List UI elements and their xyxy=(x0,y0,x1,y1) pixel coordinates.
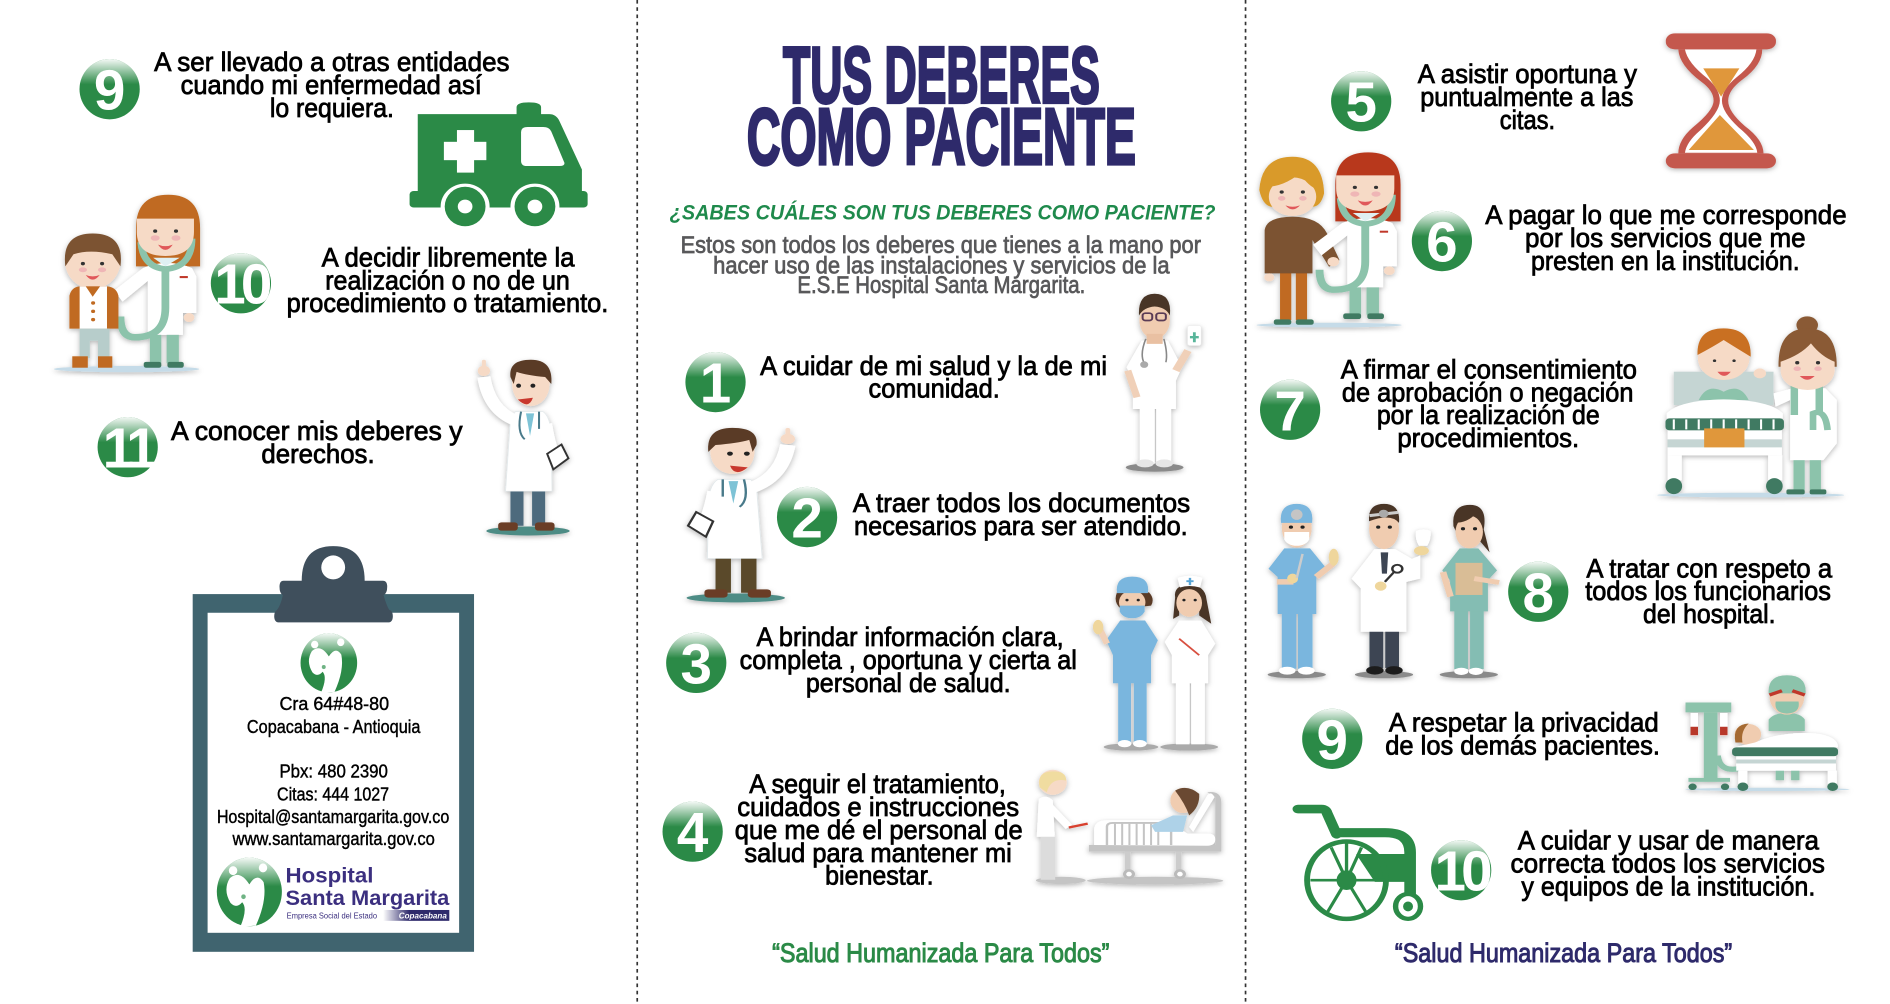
text: duty 9 right: A respetar la privacidad xyxy=(1389,708,1659,738)
badge 6: 6 xyxy=(1426,212,1458,275)
logo: Hospital Santa Margarita xyxy=(217,858,450,927)
text: duty 2 xyxy=(853,488,1190,541)
badge 8 xyxy=(1508,562,1568,625)
text: duty 5: puntualmente a las xyxy=(1420,82,1633,112)
text: duty 10 right: A cuidar y usar de manera xyxy=(1518,826,1819,856)
text: duty 7: de aprobación o negación xyxy=(1342,377,1633,407)
text: duty 8: A tratar con respeto a xyxy=(1586,553,1832,583)
illustration: woman with doctor xyxy=(1256,152,1402,327)
text: duty 7 xyxy=(1341,354,1637,453)
contact text xyxy=(217,693,449,849)
text: duty 11: derechos. xyxy=(261,439,375,469)
badge 9 xyxy=(1302,709,1362,772)
slogan navy: “Salud Humanizada Para Todos” xyxy=(1395,938,1732,968)
clipboard board xyxy=(193,546,474,952)
title: TUS DEBERES xyxy=(783,30,1100,119)
text: duty 3: personal de salud. xyxy=(806,668,1011,698)
intro paragraph xyxy=(681,232,1201,299)
text: duty 8: todos los funcionarios xyxy=(1585,576,1831,606)
contact text: Cra 64#48-80 xyxy=(279,693,389,714)
badge 3 xyxy=(666,633,726,696)
text: duty 4: cuidados e instrucciones xyxy=(737,792,1019,822)
text: duty 9 right: de los demás pacientes. xyxy=(1385,730,1660,761)
text: duty 4: salud para mantener mi xyxy=(744,838,1012,868)
text: duty 8 xyxy=(1585,553,1832,629)
badge 2 xyxy=(777,487,837,551)
panel: center column xyxy=(663,30,1223,968)
intro paragraph: E.S.E Hospital Santa Margarita. xyxy=(797,272,1085,299)
badge 4 xyxy=(663,802,723,865)
slogan green: “Salud Humanizada Para Todos” xyxy=(772,938,1109,968)
title: COMO PACIENTE xyxy=(747,92,1136,181)
logo: Hospital Santa Margarita: Santa Margarita xyxy=(285,885,450,910)
contact text: Citas: 444 1027 xyxy=(277,783,389,804)
illustration: child with doctor xyxy=(54,195,200,372)
text: duty 8: del hospital. xyxy=(1643,599,1776,629)
badge 9: 9 xyxy=(94,60,125,123)
text: duty 6: por los servicios que me xyxy=(1525,223,1806,253)
text: duty 6 xyxy=(1485,200,1847,276)
text: duty 7: por la realización de xyxy=(1377,400,1600,430)
subtitle question: ¿SABES CUÁLES SON TUS DEBERES COMO PACIENTE? xyxy=(670,201,1216,224)
text: duty 10 xyxy=(287,242,608,318)
panel: right column xyxy=(1256,33,1850,968)
text: duty 10 right: y equipos de la institución. xyxy=(1521,872,1815,902)
text: duty 1: A cuidar de mi salud y la de mi xyxy=(760,351,1107,381)
badge 6 xyxy=(1412,211,1472,275)
illustration: patient in bed with doctor xyxy=(1657,316,1844,497)
contact text: Copacabana - Antioquia xyxy=(247,716,421,737)
text: duty 2: A traer todos los documentos xyxy=(853,488,1190,518)
badge 3: 3 xyxy=(681,633,712,696)
text: duty 11: A conocer mis deberes y xyxy=(171,416,463,446)
text: duty 9 right xyxy=(1385,708,1660,761)
contact text: www.santamargarita.gov.co xyxy=(232,828,435,849)
text: duty 1 xyxy=(760,351,1107,404)
badge 1: 1 xyxy=(700,353,731,416)
icon: hourglass xyxy=(1666,33,1776,168)
intro paragraph: hacer uso de las instalaciones y servicios de la xyxy=(713,253,1170,280)
badge 7: 7 xyxy=(1274,380,1306,443)
badge 7 xyxy=(1260,380,1320,443)
text: duty 5: citas. xyxy=(1500,105,1555,135)
text: duty 10 right xyxy=(1511,826,1825,902)
text: duty 5: A asistir oportuna y xyxy=(1418,59,1638,89)
logo: Hospital Santa Margarita: Empresa Social del Estado xyxy=(287,910,377,920)
illustration: two nurses xyxy=(1093,576,1218,751)
text: duty 1: comunidad. xyxy=(869,374,1000,404)
text: duty 2: necesarios para ser atendido. xyxy=(854,511,1188,541)
badge 8: 8 xyxy=(1523,562,1554,625)
badge 5: 5 xyxy=(1345,72,1377,135)
text: duty 10: A decidir libremente la xyxy=(322,242,575,272)
text: duty 4: A seguir el tratamiento, xyxy=(749,769,1006,799)
text: duty 10: procedimiento o tratamiento. xyxy=(287,288,608,318)
illustration: surgeon with patient on stretcher xyxy=(1685,675,1850,791)
badge 10 right: 10 xyxy=(1434,841,1491,904)
illustration: laughing doctor xyxy=(687,428,795,602)
illustration: doctor at patient bed xyxy=(1036,770,1223,885)
badge 10: 10 xyxy=(214,254,271,317)
text: duty 6: A pagar lo que me corresponde xyxy=(1485,200,1847,230)
badge 5 xyxy=(1331,71,1391,135)
text: duty 9: lo requiera. xyxy=(270,93,394,123)
text: duty 4: bienestar. xyxy=(825,861,934,891)
logo: Hospital Santa Margarita: Copacabana xyxy=(399,910,447,920)
text: duty 7: A firmar el consentimiento xyxy=(1341,354,1637,384)
badge 4: 4 xyxy=(677,802,709,865)
badge 1 xyxy=(685,352,746,416)
text: duty 5 xyxy=(1418,59,1638,135)
intro paragraph: Estos son todos los deberes que tienes a la mano por xyxy=(681,232,1201,259)
text: duty 7: procedimientos. xyxy=(1397,423,1579,453)
text: duty 3 xyxy=(740,622,1077,698)
text: duty 4: que me dé el personal de xyxy=(735,815,1023,845)
text: duty 3: completa , oportuna y cierta al xyxy=(740,645,1077,675)
panel: left column xyxy=(54,47,608,952)
text: duty 3: A brindar información clara, xyxy=(756,622,1064,652)
illustration: three medical staff xyxy=(1268,504,1499,678)
badge 11: 11 xyxy=(103,418,156,481)
icon: wheelchair xyxy=(1298,809,1421,919)
badge 9 xyxy=(80,59,140,123)
illustration: doctor with glasses and medicine xyxy=(1126,294,1201,472)
text: duty 9: cuando mi enfermedad así xyxy=(181,70,482,100)
icon: ambulance xyxy=(410,102,588,229)
logo icon top xyxy=(301,633,357,693)
contact text: Pbx: 480 2390 xyxy=(279,760,388,781)
clipboard: contact card xyxy=(193,546,474,952)
badge 9: 9 xyxy=(1317,709,1348,772)
title xyxy=(747,30,1136,181)
text: duty 4 xyxy=(735,769,1023,891)
logo: Hospital Santa Margarita: Hospital xyxy=(285,862,373,887)
text: duty 9: A ser llevado a otras entidades xyxy=(154,47,510,77)
contact text: Hospital@santamargarita.gov.co xyxy=(217,806,449,827)
text: duty 10 right: correcta todos los servicios xyxy=(1511,849,1825,879)
text: duty 10: realización o no de un xyxy=(325,265,570,295)
badge 2: 2 xyxy=(791,488,823,551)
text: duty 6: presten en la institución. xyxy=(1531,246,1800,276)
text: duty 9 xyxy=(154,47,510,123)
illustration: doctor pointing up xyxy=(478,360,570,535)
text: duty 11 xyxy=(171,416,463,469)
